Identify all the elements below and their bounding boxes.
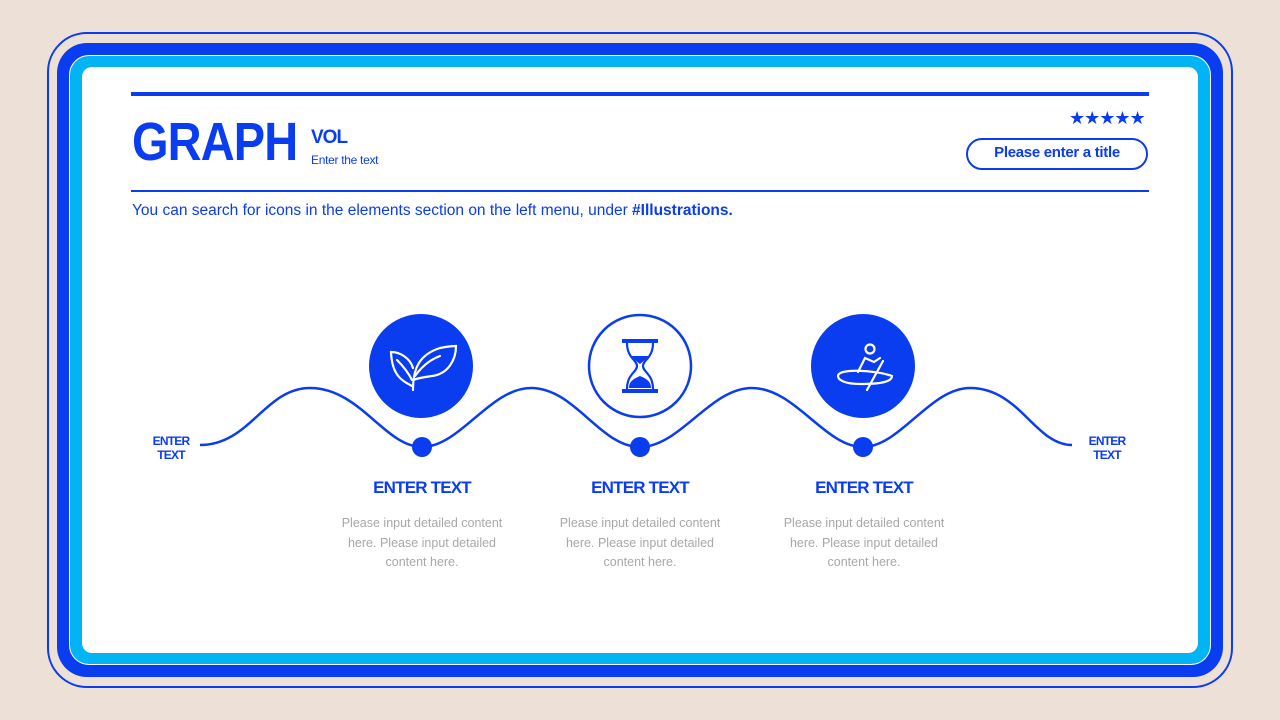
icon: hourglass [589, 315, 691, 417]
white card [82, 67, 1198, 653]
side label left [153, 434, 190, 462]
dot 1 [412, 437, 432, 457]
item 1: here. Please input detailed [348, 536, 496, 550]
item 1: content here. [386, 555, 458, 569]
subtitle block: Enter the text [311, 153, 378, 167]
item 2: ENTER TEXT [591, 478, 689, 497]
item 1 [342, 478, 502, 569]
side label left: ENTER [153, 434, 189, 448]
item 2: here. Please input detailed [566, 536, 714, 550]
title: GRAPH [132, 112, 297, 172]
side label right: ENTER [1089, 434, 1125, 448]
dot 2 [630, 437, 650, 457]
stars: ★★★★★ [1069, 108, 1145, 128]
frame: light blue band [69, 55, 1211, 665]
item 1: ENTER TEXT [373, 478, 471, 497]
header rule bottom [131, 190, 1149, 192]
item 3: here. Please input detailed [790, 536, 938, 550]
side label left: TEXT [157, 448, 185, 462]
header rule top [131, 92, 1149, 96]
item 1: Please input detailed content [342, 516, 502, 530]
item 2 [560, 478, 720, 569]
title pill [966, 138, 1148, 170]
item 2: content here. [604, 555, 676, 569]
icon: rowing [811, 314, 915, 418]
side label right: TEXT [1093, 448, 1121, 462]
subtitle block [311, 127, 378, 167]
icon: leaf [369, 314, 473, 418]
item 2: Please input detailed content [560, 516, 720, 530]
title pill: Please enter a title [994, 144, 1120, 161]
subtitle block: VOL [311, 127, 347, 148]
side label right [1089, 434, 1126, 462]
item 3: ENTER TEXT [815, 478, 913, 497]
item 3 [784, 478, 944, 569]
description: You can search for icons in the elements section on the left menu, under #Illustrations. [132, 202, 733, 219]
item 3: Please input detailed content [784, 516, 944, 530]
dot 3 [853, 437, 873, 457]
item 3: content here. [828, 555, 900, 569]
